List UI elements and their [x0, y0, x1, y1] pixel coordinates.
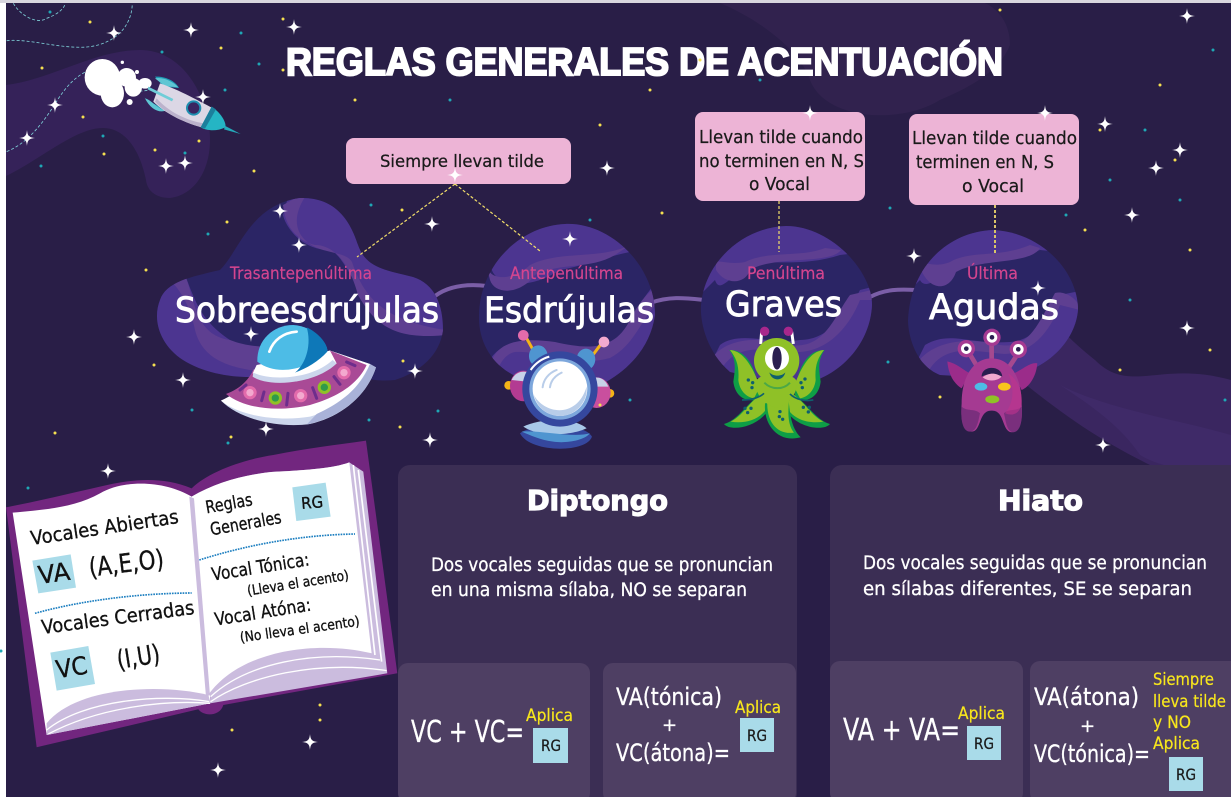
connectors between planets	[435, 285, 916, 303]
box: VA tónica + VC átona: Aplica	[735, 698, 781, 718]
box: VA + VA: VA + VA=	[843, 713, 960, 748]
smoke	[85, 59, 152, 107]
text: vocales abiertas: Vocales Abiertas	[29, 505, 180, 550]
callout: Siempre llevan tilde: Siempre llevan tilde	[380, 152, 544, 172]
nebula: top left	[6, 50, 210, 198]
box: VA + VA: RG	[974, 734, 994, 753]
text: vocales cerradas: Vocales Cerradas	[40, 596, 196, 639]
box: VA átona + VC tónica: VA(átona)	[1034, 683, 1139, 711]
labels: Esdrújulas: Esdrújulas	[484, 291, 654, 331]
right page stack	[192, 462, 387, 703]
left page	[13, 484, 211, 735]
callout: graves: o Vocal	[749, 175, 810, 195]
rocket	[7, 3, 241, 152]
labels: Graves	[725, 264, 842, 325]
labels: Agudas	[929, 262, 1059, 328]
description: Dos vocales seguidas que se pronuncian	[431, 555, 773, 576]
rocket body	[144, 77, 241, 134]
box: VA átona + VC tónica: +	[1080, 716, 1095, 737]
title: REGLAS GENERALES DE ACENTUACIÓN	[286, 40, 1003, 84]
callout: Siempre llevan tilde	[346, 138, 571, 257]
labels: Agudas: Agudas	[929, 288, 1059, 328]
text: vocal tónica: Vocal Tónica:	[210, 549, 311, 586]
book: VC	[54, 651, 90, 684]
heading: Diptongo	[527, 484, 668, 517]
box: VA + VA: Aplica	[958, 704, 1005, 724]
box: VA átona + VC tónica	[1030, 661, 1231, 797]
box: VC + VC: RG	[541, 736, 561, 755]
panel: Diptongo	[398, 465, 797, 797]
icon: astronaut helmet	[504, 330, 614, 449]
text: A,E,O: (A,E,O)	[87, 545, 166, 584]
spine	[189, 497, 210, 697]
VC badge	[50, 646, 95, 691]
book: (Lleva el acento)	[246, 568, 350, 600]
callout: graves: no terminen en N, S	[699, 152, 864, 172]
text: vocal átona: Vocal Atóna:	[213, 595, 313, 631]
planet: Sobreesdrújulas	[157, 198, 443, 380]
panel: Hiato	[830, 465, 1231, 797]
box: VA + VA	[830, 661, 1023, 797]
labels: Agudas: Última	[967, 262, 1018, 284]
book	[6, 441, 397, 747]
labels: Esdrújulas: Antepenúltima	[510, 264, 623, 284]
callout: agudas: Llevan tilde cuando	[912, 129, 1077, 149]
box: VA átona + VC tónica: y NO	[1153, 713, 1191, 732]
box: VA tónica + VC átona: +	[662, 715, 677, 736]
labels: Esdrújulas	[484, 264, 654, 331]
box: VA átona + VC tónica: Aplica	[1153, 734, 1200, 753]
dashed flight path	[7, 3, 152, 152]
callout: agudas: o Vocal	[962, 177, 1024, 197]
box: VA átona + VC tónica: RG	[1176, 765, 1196, 784]
RG badge	[292, 483, 331, 521]
planet: Esdrújulas	[479, 224, 655, 382]
box: VA tónica + VC átona: VC(átona)=	[616, 739, 730, 767]
labels: Graves: Graves	[725, 285, 842, 325]
callout: agudas	[909, 114, 1079, 255]
box: VA átona + VC tónica: Siempre	[1153, 670, 1214, 689]
labels: Graves: Penúltima	[747, 264, 825, 284]
book: VA	[36, 557, 72, 590]
callout: agudas: terminen en N, S	[916, 153, 1054, 173]
callout: graves: Llevan tilde cuando	[699, 128, 863, 148]
box: VA átona + VC tónica: VC(tónica)=	[1034, 740, 1150, 768]
panel: Hiato: en sílabas diferentes, SE se separan	[863, 579, 1192, 600]
box: VA tónica + VC átona: VA(tónica)	[616, 683, 722, 711]
book: Generales	[209, 508, 283, 540]
box: VC + VC: Aplica	[526, 706, 573, 726]
planet: Agudas	[908, 230, 1078, 376]
nebula: lower right	[1020, 300, 1231, 470]
left page stack	[47, 689, 211, 735]
icon: pink alien	[947, 329, 1037, 432]
icon: UFO	[221, 325, 376, 425]
book: RG	[300, 492, 324, 513]
description: Dos vocales seguidas que se pronuncian	[863, 553, 1207, 574]
text: reglas generales: Reglas	[204, 490, 254, 518]
box: VC + VC	[398, 663, 590, 797]
box: VC + VC: VC + VC=	[411, 715, 524, 750]
labels: Sobreesdrújulas: Sobreesdrújulas	[175, 291, 439, 331]
nebula: top right	[720, 3, 1010, 115]
labels: Sobreesdrújulas	[175, 264, 439, 331]
icon: green alien	[724, 327, 830, 439]
book: (No lleva el acento)	[239, 614, 361, 646]
heading: Hiato	[998, 484, 1083, 517]
VA badge	[32, 554, 76, 593]
cover	[6, 441, 397, 747]
text: I,U: (I,U)	[115, 639, 162, 676]
callout: graves	[695, 112, 865, 252]
panel: Diptongo: en una misma sílaba, NO se separan	[431, 580, 747, 601]
planet: Graves	[701, 226, 872, 380]
labels: Sobreesdrújulas: Trasantepenúltima	[229, 264, 372, 284]
box: VA tónica + VC átona: RG	[747, 726, 767, 745]
box: VA tónica + VC átona	[603, 663, 796, 797]
